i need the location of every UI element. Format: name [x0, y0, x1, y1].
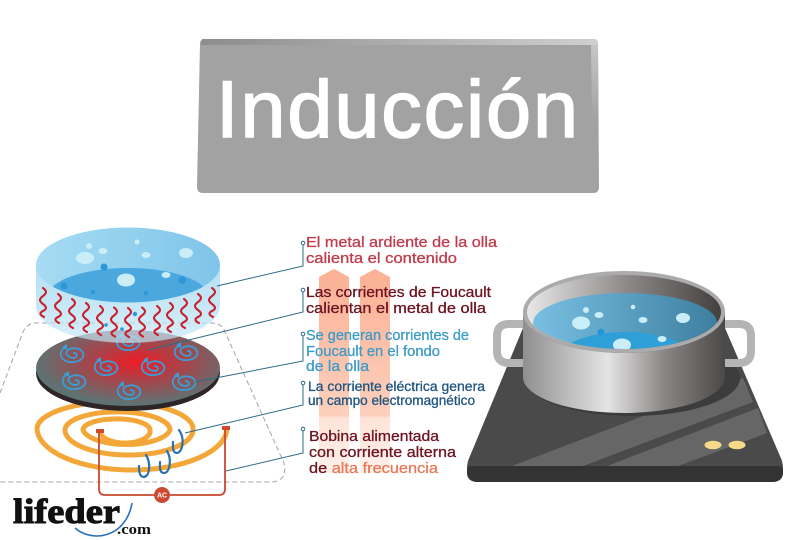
label: coil: de alta frecuencia: [309, 460, 439, 477]
stripes: [512, 378, 753, 466]
label: Foucault heat: [306, 285, 491, 317]
label: hot metal: [306, 235, 498, 267]
label: eddy currents: Se generan corrientes de: [306, 328, 469, 344]
logo: [13, 492, 152, 538]
label: hot metal: calienta el contenido: [306, 251, 457, 267]
label: coil: [309, 428, 457, 477]
AC circuit wire: [99, 429, 225, 495]
dashed cooktop outline: [0, 323, 285, 482]
pot water: [533, 293, 717, 349]
induction cooktop: [467, 328, 783, 482]
label: eddy currents: [306, 328, 469, 375]
magnetic field loops: [139, 430, 183, 477]
label: electromagnetic field: La corriente eléctrica genera: [308, 379, 485, 394]
title panel: [197, 39, 599, 193]
label: coil: Bobina alimentada: [309, 428, 440, 445]
logo: lifeder: [13, 492, 120, 531]
pot: [497, 271, 751, 413]
heat waves: [40, 288, 215, 337]
pot shadow: [524, 340, 740, 416]
induction coil: [37, 402, 230, 503]
AC source: [154, 487, 170, 503]
buttons: [704, 441, 722, 449]
bubbles: [76, 240, 193, 286]
logo: .com: [117, 522, 152, 538]
label: coil: con corriente alterna: [309, 444, 457, 461]
metal pot base disc: [36, 330, 220, 411]
label: eddy currents: Foucault en el fondo: [306, 344, 440, 360]
title text: Inducción: [216, 65, 578, 155]
pot body: [523, 312, 725, 413]
handles: [497, 324, 751, 363]
water cylinder: [36, 228, 220, 343]
label: electromagnetic field: un campo electromagnético: [308, 393, 475, 408]
eddy currents: [61, 332, 197, 399]
label: hot metal: El metal ardiente de la olla: [306, 235, 498, 251]
label: electromagnetic field: [308, 379, 485, 408]
leader lines: [148, 241, 305, 471]
label: eddy currents: de la olla: [306, 359, 370, 375]
AC source: AC: [157, 492, 167, 500]
label: Foucault heat: Las corrientes de Foucault: [306, 285, 491, 301]
arrows: rising heat: [319, 269, 390, 473]
label: Foucault heat: calientan el metal de olla: [306, 301, 487, 317]
